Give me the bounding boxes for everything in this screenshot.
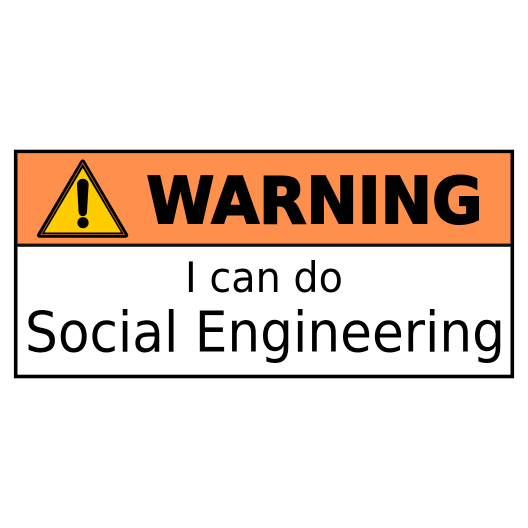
text: I can do: I can do bbox=[185, 253, 343, 302]
orange header band bbox=[18, 153, 510, 244]
exclamation mark bbox=[77, 179, 89, 228]
header divider bbox=[17, 244, 511, 247]
sign body bbox=[16, 152, 512, 376]
warning sign bbox=[16, 152, 512, 376]
icon: warning triangle bbox=[40, 162, 126, 235]
heading: WARNING: WARNING bbox=[146, 165, 482, 239]
